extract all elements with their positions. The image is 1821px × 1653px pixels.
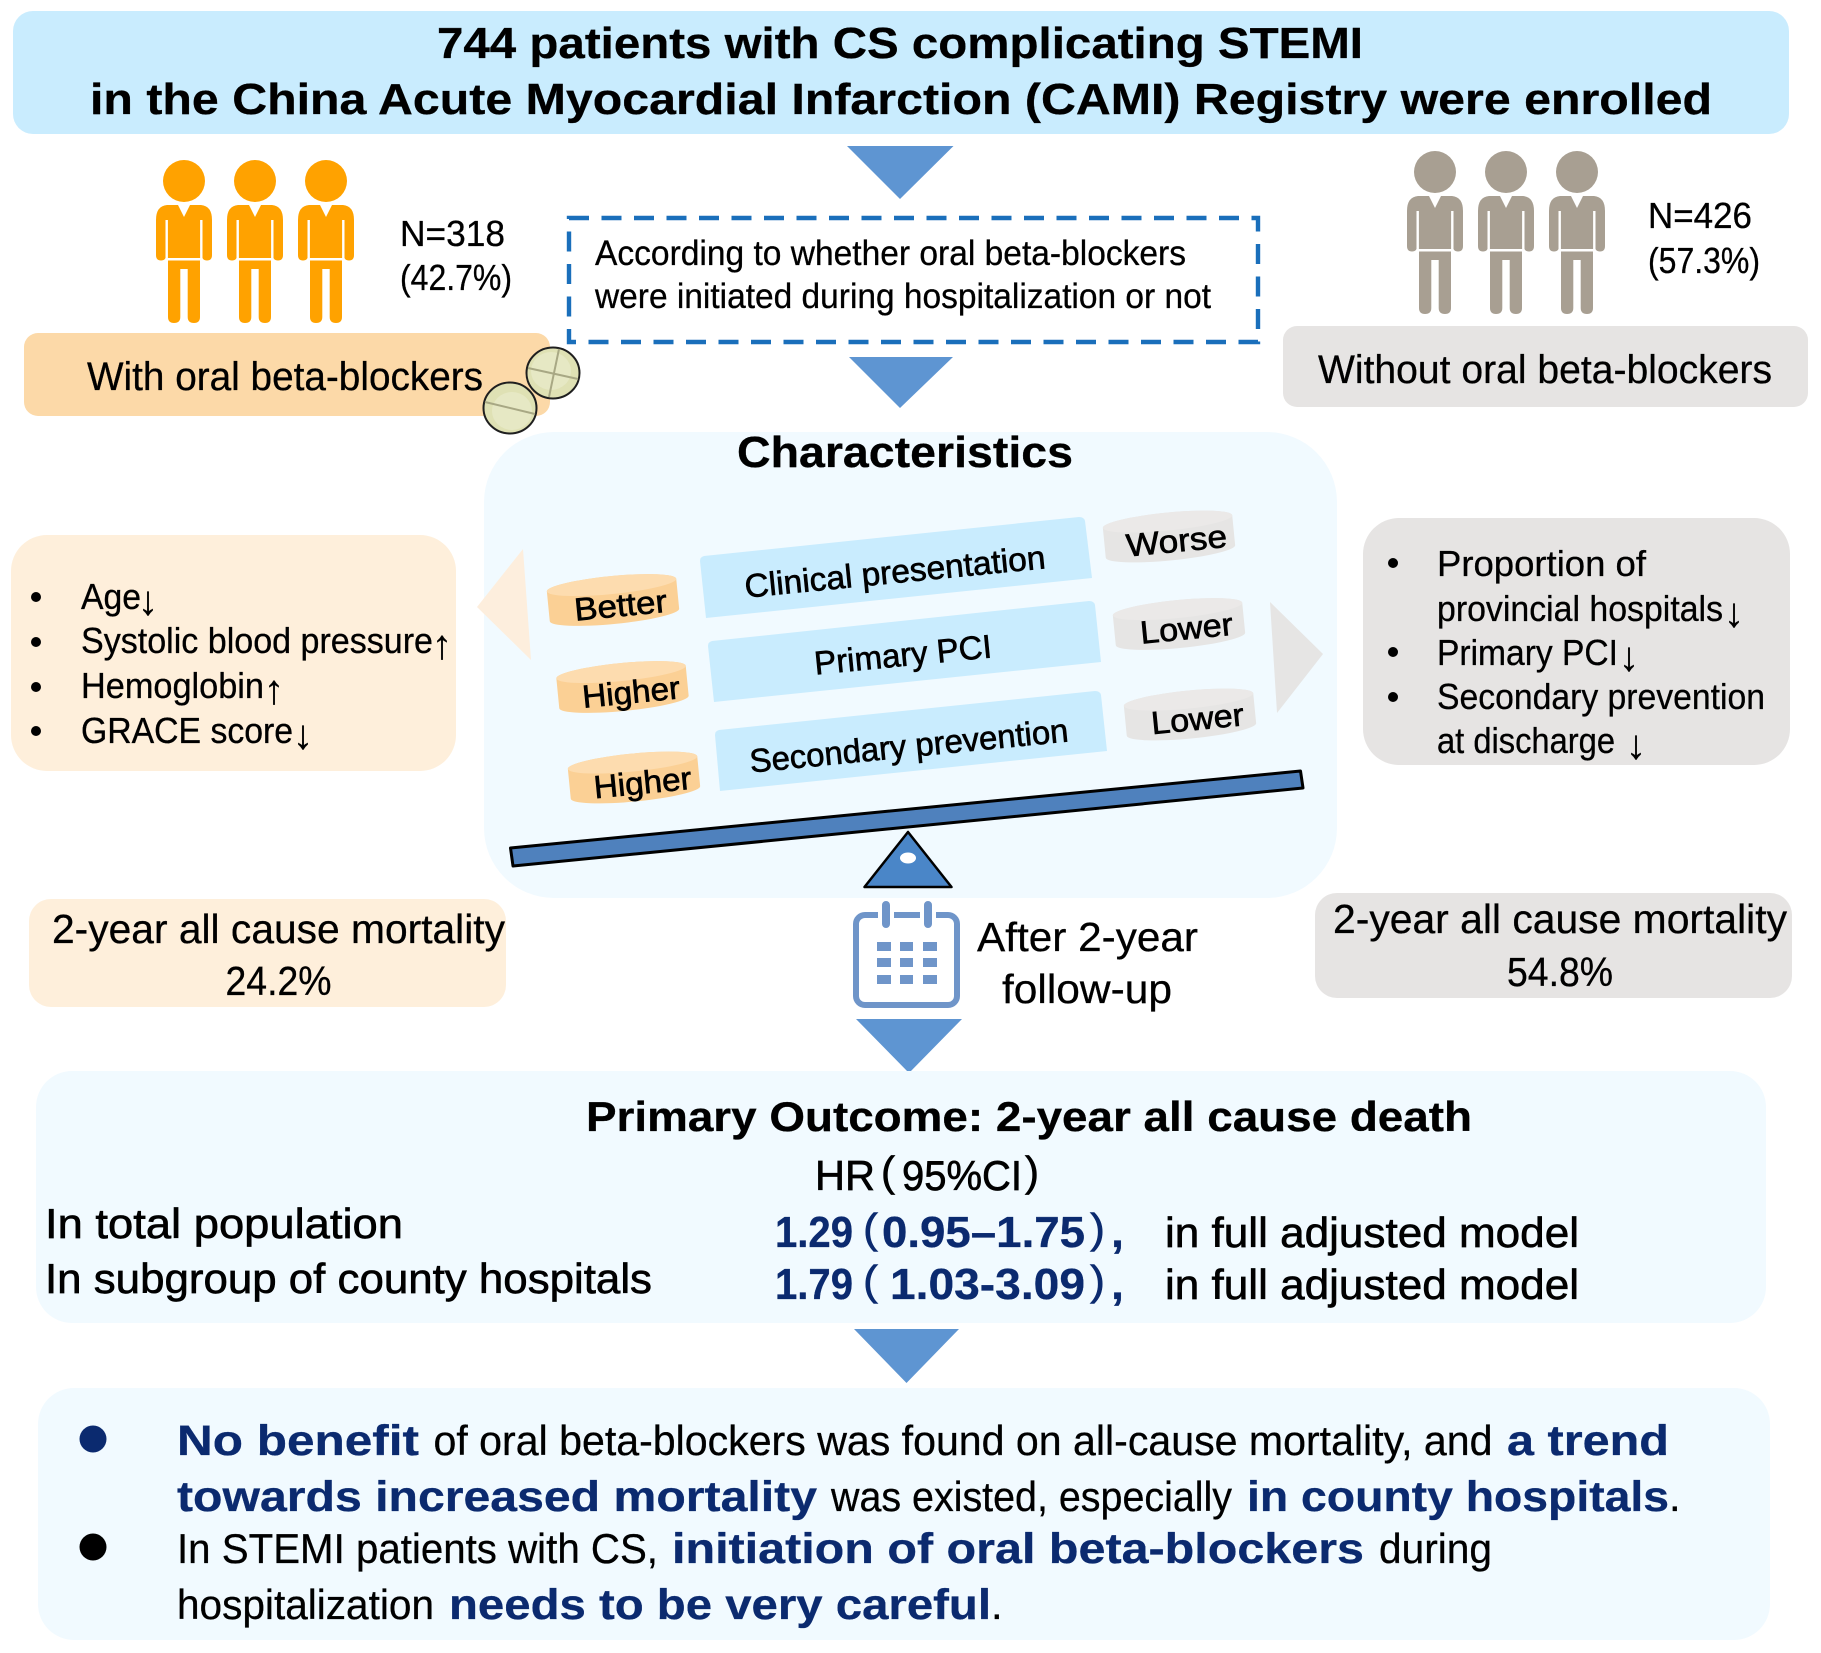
panel: worse characteristics list: ↓ bbox=[1619, 634, 1639, 680]
weight: higher (primary PCI) bbox=[555, 657, 690, 717]
arrow: towards better side bbox=[477, 549, 531, 660]
group count: without beta-blockers: N=426 bbox=[1648, 195, 1752, 236]
header banner bbox=[13, 11, 1789, 134]
label: with oral beta-blockers: With oral beta-blockers bbox=[87, 355, 483, 399]
arrow: outcome to conclusion bbox=[854, 1329, 959, 1383]
weight: lower (secondary prevention): Lower bbox=[1149, 696, 1246, 741]
conclusion 1: in county hospitals bbox=[1247, 1473, 1669, 1521]
column heading: hazard ratio bbox=[815, 1148, 1039, 1199]
panel: characteristics bbox=[477, 428, 1337, 898]
conclusion 1: of oral beta-blockers was found on all-cause mortality, and bbox=[434, 1417, 1492, 1464]
conclusion 1: was existed, especially bbox=[830, 1473, 1232, 1520]
follow-up label: After 2-year bbox=[977, 914, 1198, 960]
row: total population: ) bbox=[1090, 1205, 1105, 1252]
panel: better characteristics list: ↑ bbox=[432, 622, 452, 668]
weight: higher (secondary prevention) bbox=[567, 747, 701, 808]
callout: mortality with beta-blockers: 2-year all cause mortality bbox=[52, 906, 505, 952]
conclusion 1: No benefit bbox=[177, 1417, 419, 1465]
panel: better characteristics list: GRACE score bbox=[81, 710, 293, 751]
heading: characteristics: Characteristics bbox=[737, 428, 1073, 477]
column heading: hazard ratio: 95%CI bbox=[902, 1152, 1022, 1199]
label: with oral beta-blockers bbox=[24, 333, 550, 416]
panel: worse characteristics list: Primary PCI bbox=[1437, 632, 1618, 673]
icon: gray patients bbox=[1407, 151, 1605, 314]
panel: better characteristics list: ↑ bbox=[264, 666, 284, 712]
conclusion 1: . bbox=[1669, 1473, 1681, 1520]
callout: mortality with beta-blockers bbox=[29, 899, 506, 1007]
panel: worse characteristics list: provincial hospitals bbox=[1437, 588, 1723, 629]
callout: mortality without beta-blockers: 2-year all cause mortality bbox=[1333, 896, 1787, 942]
conclusion 1: a trend bbox=[1507, 1417, 1669, 1465]
weight: worse: Worse bbox=[1124, 518, 1228, 564]
row: total population bbox=[45, 1200, 1579, 1257]
icon: calendar bbox=[856, 905, 957, 1005]
arrow: enrolled to grouping bbox=[847, 146, 954, 199]
panel: better characteristics list: Hemoglobin bbox=[81, 665, 264, 706]
row: total population: , bbox=[1111, 1208, 1124, 1257]
weight: worse bbox=[1102, 506, 1236, 567]
heading: primary outcome: Primary Outcome: 2-year all cause death bbox=[586, 1093, 1472, 1140]
arrow: follow-up to outcome bbox=[856, 1019, 962, 1073]
panel: better characteristics list: Systolic blood pressure bbox=[81, 620, 433, 661]
row: clinical presentation: Clinical presentation bbox=[743, 538, 1047, 605]
row: secondary prevention bbox=[715, 691, 1107, 791]
panel: worse characteristics list: ↓ bbox=[1724, 590, 1744, 636]
panel: worse characteristics list bbox=[1363, 518, 1790, 768]
callout: mortality without beta-blockers: 54.8% bbox=[1507, 949, 1613, 995]
callout: mortality without beta-blockers bbox=[1315, 893, 1792, 998]
panel: conclusions bbox=[38, 1388, 1770, 1640]
row: county hospitals: ( bbox=[863, 1257, 878, 1304]
arrow: towards worse side bbox=[1270, 602, 1323, 713]
row: primary PCI bbox=[708, 601, 1101, 702]
conclusion 2: initiation of oral beta-blockers bbox=[672, 1525, 1364, 1573]
title line 1: 744 patients with CS complicating STEMI bbox=[437, 19, 1363, 68]
row: county hospitals: , bbox=[1111, 1260, 1124, 1309]
row: county hospitals: in full adjusted model bbox=[1165, 1261, 1579, 1308]
conclusion 2: hospitalization bbox=[177, 1581, 434, 1628]
conclusion 2 bbox=[80, 1525, 1492, 1629]
group count: without beta-blockers: (57.3%) bbox=[1648, 240, 1760, 281]
seesaw beam bbox=[510, 771, 1303, 866]
dashed grouping criterion box: According to whether oral beta-blockers bbox=[595, 234, 1186, 273]
row: county hospitals: In subgroup of county hospitals bbox=[45, 1255, 652, 1302]
weight: better bbox=[546, 570, 680, 630]
conclusion 1 bbox=[80, 1417, 1681, 1521]
group count: with beta-blockers bbox=[400, 213, 512, 298]
row: county hospitals: ) bbox=[1090, 1257, 1105, 1304]
panel: better characteristics list: Age bbox=[81, 576, 141, 617]
column heading: hazard ratio: ) bbox=[1025, 1148, 1039, 1195]
panel: better characteristics list: ↓ bbox=[293, 712, 313, 758]
weight: higher (primary PCI): Higher bbox=[581, 669, 682, 715]
panel: worse characteristics list: at discharge bbox=[1437, 720, 1615, 761]
row: total population: ( bbox=[863, 1205, 878, 1252]
row: total population: 0.95–1.75 bbox=[882, 1208, 1085, 1257]
row: clinical presentation bbox=[700, 517, 1092, 618]
row: secondary prevention: Secondary prevention bbox=[748, 712, 1070, 780]
panel: worse characteristics list: Secondary prevention bbox=[1437, 676, 1765, 717]
weight: better: Better bbox=[573, 583, 669, 628]
weight: lower (primary PCI): Lower bbox=[1138, 606, 1235, 651]
dashed grouping criterion box: were initiated during hospitalization or not bbox=[594, 277, 1211, 316]
icon: orange patients bbox=[156, 160, 354, 323]
conclusion 2: needs to be very careful bbox=[449, 1581, 991, 1629]
group count: without beta-blockers bbox=[1648, 195, 1760, 281]
seesaw fulcrum bbox=[864, 832, 952, 887]
panel: primary outcome bbox=[36, 1071, 1766, 1323]
row: county hospitals: 1.79 bbox=[775, 1260, 853, 1309]
label: without oral beta-blockers: Without oral beta-blockers bbox=[1318, 348, 1772, 392]
callout: mortality with beta-blockers: 24.2% bbox=[226, 958, 332, 1004]
conclusion 1: towards increased mortality bbox=[177, 1473, 817, 1521]
dashed grouping criterion box bbox=[569, 218, 1258, 342]
panel: worse characteristics list: Proportion of bbox=[1437, 543, 1647, 584]
row: total population: in full adjusted model bbox=[1165, 1209, 1579, 1256]
conclusion 2: during bbox=[1379, 1525, 1492, 1572]
group count: with beta-blockers: (42.7%) bbox=[400, 257, 512, 298]
conclusion 2: In STEMI patients with CS, bbox=[177, 1525, 658, 1572]
title line 2: in the China Acute Myocardial Infarction (CAMI) Registry were enrolled bbox=[90, 75, 1712, 124]
weight: higher (secondary prevention): Higher bbox=[592, 760, 693, 805]
column heading: hazard ratio: ( bbox=[881, 1148, 895, 1195]
conclusion 2: . bbox=[991, 1581, 1003, 1628]
arrow: grouping to characteristics bbox=[849, 357, 953, 408]
follow-up label bbox=[977, 914, 1198, 1012]
group count: with beta-blockers: N=318 bbox=[400, 213, 505, 254]
panel: worse characteristics list: ↓ bbox=[1626, 722, 1646, 768]
panel: better characteristics list: ↓ bbox=[138, 578, 158, 624]
row: total population: 1.29 bbox=[775, 1208, 853, 1257]
label: without oral beta-blockers bbox=[1283, 326, 1808, 407]
weight: lower (secondary prevention) bbox=[1123, 684, 1257, 745]
icon: pills bbox=[484, 348, 580, 434]
column heading: hazard ratio: HR bbox=[815, 1152, 875, 1199]
row: county hospitals: 1.03-3.09 bbox=[890, 1260, 1085, 1309]
follow-up label: follow-up bbox=[1002, 966, 1172, 1012]
row: primary PCI: Primary PCI bbox=[812, 627, 993, 682]
weight: lower (primary PCI) bbox=[1112, 594, 1246, 654]
row: county hospitals bbox=[45, 1255, 1579, 1309]
panel: better characteristics list bbox=[11, 535, 456, 771]
row: total population: In total population bbox=[45, 1200, 403, 1247]
